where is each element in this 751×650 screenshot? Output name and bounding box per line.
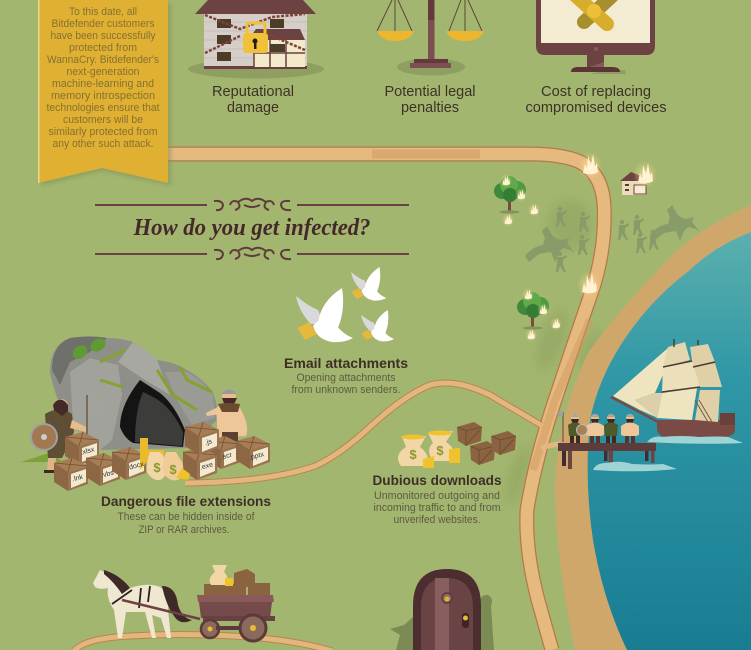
tree burning upper	[494, 174, 540, 227]
icon: scales of justice	[377, 0, 484, 76]
wave behind ship	[647, 436, 743, 444]
ribbon callout: memory introspection	[51, 90, 155, 102]
ribbon callout: Bitdefender customers	[52, 18, 155, 30]
crates with file extensions: $	[153, 460, 161, 475]
ribbon callout: have been successfully	[50, 30, 156, 42]
icon: doves with envelopes	[296, 267, 394, 342]
road spur to pier	[541, 444, 560, 448]
pier with vikings	[558, 411, 656, 469]
crates with file extensions: .lnk	[71, 474, 84, 483]
crates with file extensions: .vbs	[101, 469, 115, 480]
silhouettes of raiders	[525, 205, 700, 272]
ribbon callout: machine-learning and	[52, 78, 154, 90]
label: email attachments: from unknown senders.	[292, 384, 400, 396]
sandy beach	[555, 205, 751, 650]
crates with file extensions: .js	[204, 438, 213, 447]
ribbon callout: technologies ensure that	[46, 102, 160, 114]
label: email attachments: Email attachments	[284, 356, 408, 371]
icon: money bags and crates: $	[409, 447, 417, 462]
viking with axe	[206, 389, 247, 446]
label: potential legal penalties: Potential legal	[384, 83, 476, 100]
ribbon callout: WannaCry. Bitdefender's	[47, 54, 159, 66]
label: reputational damage: Reputational	[212, 83, 294, 100]
crates with file extensions: $	[169, 462, 177, 477]
icon: monitor with bandage	[536, 0, 655, 74]
ribbon callout: customers will be	[63, 114, 143, 126]
label: potential legal penalties	[384, 83, 476, 116]
heading: how do you get infected	[95, 199, 409, 259]
crates with file extensions: .docx	[127, 461, 145, 472]
viking with shield	[31, 395, 100, 473]
ribbon callout: protected from	[69, 42, 137, 54]
crates with file extensions: .scr	[220, 452, 234, 461]
ribbon callout: next-generation	[66, 66, 140, 78]
label: reputational damage	[212, 83, 294, 116]
label: dubious downloads: Dubious downloads	[372, 472, 502, 488]
heading: how do you get infected: How do you get infected?	[133, 215, 370, 241]
tree burning lower	[517, 288, 562, 342]
label: dangerous file extensions: ZIP or RAR archives.	[138, 524, 230, 536]
wave below pier	[593, 462, 677, 471]
label: dubious downloads: Unmonitored outgoing and	[374, 490, 500, 502]
ship	[611, 339, 735, 437]
fire on the road	[578, 152, 602, 180]
ribbon callout: similarly protected from	[48, 126, 158, 138]
label: reputational damage: damage	[227, 99, 279, 116]
icon: money bags and crates	[398, 422, 516, 468]
icon: cave with vikings and crates	[21, 336, 247, 473]
icon: horse and cart	[93, 565, 275, 641]
label: potential legal penalties: penalties	[401, 99, 459, 116]
crates with file extensions	[54, 422, 270, 491]
fire on the road lower	[577, 271, 601, 299]
crates with file extensions: .exe	[199, 461, 214, 472]
ribbon callout: To this date, all	[69, 6, 137, 18]
winding branch road	[185, 383, 541, 483]
grass scuffs along road	[500, 199, 605, 508]
ribbon callout: any other such attack.	[52, 138, 154, 150]
label: dangerous file extensions: These can be hidden inside of	[118, 511, 255, 523]
label: cost of replacing compromised devices: compromised devices	[526, 99, 666, 116]
icon: money bags and crates: $	[436, 443, 444, 458]
icon: door with goblins	[390, 569, 494, 650]
crates with file extensions: .xlsx	[80, 446, 96, 457]
label: dubious downloads	[372, 472, 502, 526]
sea	[588, 232, 751, 650]
label: email attachments	[284, 356, 408, 396]
crates with file extensions: .pptx	[248, 451, 265, 462]
label: cost of replacing compromised devices	[526, 83, 666, 116]
label: dubious downloads: incoming traffic to and from	[374, 502, 500, 514]
ribbon callout	[38, 0, 171, 186]
main road	[168, 154, 604, 650]
icon: chained house	[188, 0, 324, 78]
label: cost of replacing compromised devices: Cost of replacing	[541, 83, 651, 100]
label: email attachments: Opening attachments	[296, 372, 396, 384]
lower road	[74, 635, 332, 650]
label: dubious downloads: unverifed websites.	[394, 514, 480, 526]
label: dangerous file extensions: Dangerous file extensions	[101, 493, 271, 509]
label: dangerous file extensions	[101, 493, 271, 536]
icon: burning cottage	[620, 161, 657, 195]
